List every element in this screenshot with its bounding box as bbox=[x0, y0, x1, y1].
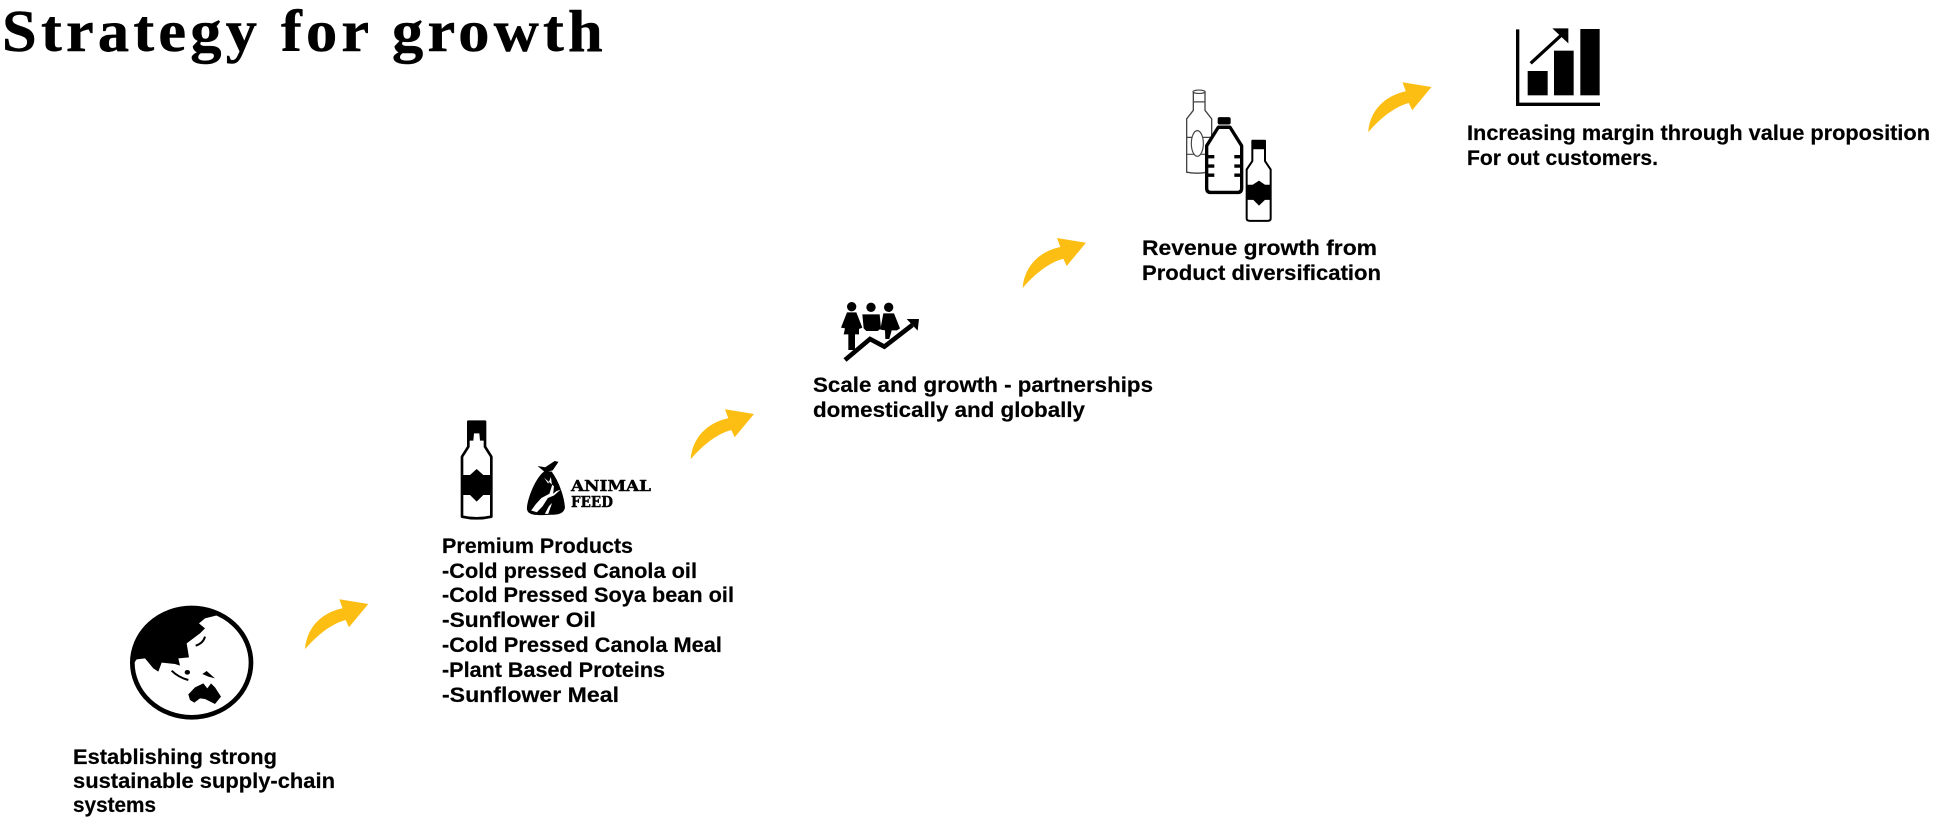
text: premium products list: -Sunflower Oil bbox=[442, 609, 596, 632]
text: scale and growth bbox=[813, 374, 1153, 422]
icon: animal feed bag: ANIMAL bbox=[570, 477, 652, 495]
icon: animal feed bag: FEED bbox=[571, 493, 613, 511]
arrow 4 bbox=[1368, 82, 1432, 132]
icon: three bottles bbox=[1187, 90, 1271, 221]
icon: animal feed bag bbox=[527, 461, 652, 515]
step 3: scale and growth bbox=[813, 302, 1153, 422]
text: premium products list: -Cold pressed Canola oil bbox=[442, 560, 697, 583]
text: premium products list: -Plant Based Proteins bbox=[442, 659, 665, 682]
text: increasing margin: Increasing margin through value proposition bbox=[1467, 122, 1930, 145]
text: scale and growth: domestically and globally bbox=[813, 399, 1085, 422]
text: premium products list bbox=[442, 535, 734, 707]
text: scale and growth: Scale and growth - partnerships bbox=[813, 374, 1153, 397]
text: revenue growth bbox=[1142, 237, 1381, 285]
arrow 3 bbox=[1023, 238, 1086, 288]
icon: bar chart with arrow bbox=[1516, 28, 1600, 106]
arrow 1 bbox=[305, 599, 368, 649]
step 1: supply chain bbox=[73, 603, 335, 817]
text: supply chain bbox=[73, 746, 335, 817]
step 4: revenue growth bbox=[1142, 90, 1381, 285]
text: supply chain: systems bbox=[73, 794, 156, 817]
icon: oil bottle bbox=[462, 421, 491, 518]
step 5: increasing margin bbox=[1467, 28, 1930, 170]
icon: people with rising arrow bbox=[841, 302, 919, 360]
text: revenue growth: Revenue growth from bbox=[1142, 237, 1377, 260]
arrow 2 bbox=[691, 409, 754, 459]
icon: globe bbox=[128, 603, 251, 717]
text: premium products list: -Cold Pressed Canola Meal bbox=[442, 634, 722, 657]
step 2: premium products bbox=[442, 421, 734, 707]
text: premium products list: Premium Products bbox=[442, 535, 633, 558]
text: increasing margin bbox=[1467, 122, 1930, 170]
text: premium products list: -Sunflower Meal bbox=[442, 684, 619, 707]
text: increasing margin: For out customers. bbox=[1467, 147, 1658, 170]
text: premium products list: -Cold Pressed Soya bean oil bbox=[442, 584, 734, 607]
text: supply chain: Establishing strong bbox=[73, 746, 277, 769]
text: supply chain: sustainable supply-chain bbox=[73, 770, 335, 793]
text: revenue growth: Product diversification bbox=[1142, 262, 1381, 285]
